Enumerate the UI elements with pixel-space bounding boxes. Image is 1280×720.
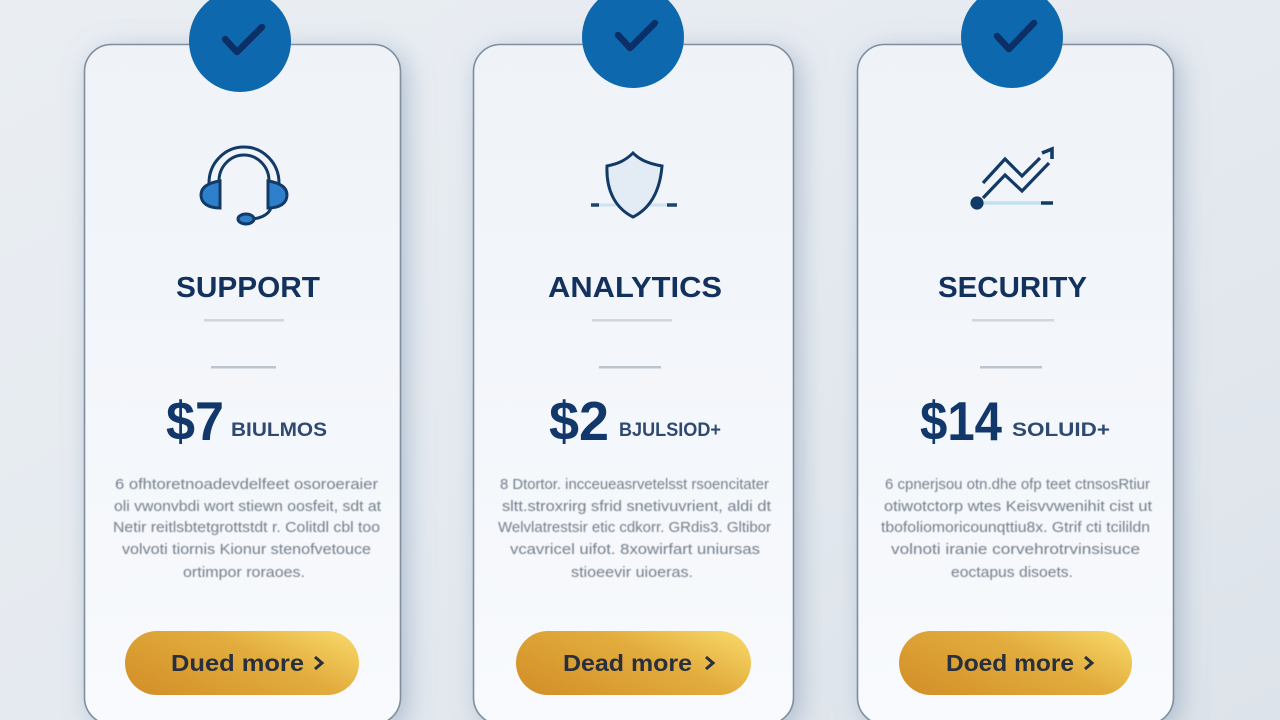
description: oli vwonvbdi wort stiewn oosfeit, sdt at [114,498,382,515]
price unit: SOLUID+ [1012,420,1110,441]
icon: check badge [582,0,684,88]
description: vcavricel uifot. 8xowirfart uniursas [510,541,760,558]
description [498,476,772,581]
description: 6 cpnerjsou otn.dhe ofp teet ctnsosRtiur [885,476,1150,493]
heading: ANALYTICS [548,272,722,304]
button: Doed more [946,650,1074,676]
description: volvoti tiornis Kionur stenofvetouce [122,541,371,558]
button [516,631,751,695]
button [125,631,359,695]
description: ortimpor roraoes. [183,564,305,581]
card background [858,44,1174,720]
lower divider [599,366,661,368]
description [881,476,1153,581]
upper divider [592,319,672,322]
button: Dead more [563,650,692,676]
card background [474,44,794,720]
panel: security [858,0,1174,720]
icon: shield [591,153,677,217]
panel: support [84,0,400,720]
lower divider [980,366,1042,368]
icon: check badge [189,0,291,92]
description: 6 ofhtoretnoadevdelfeet osoroeraier [115,476,378,493]
price: $7 [166,390,224,452]
description: 8 Dtortor. incceueasrvetelsst rsoencitater [500,476,769,493]
icon: growth chart [972,149,1053,208]
icon: headset [201,147,287,224]
description: eoctapus disoets. [951,564,1073,581]
description [113,476,382,581]
upper divider [204,319,284,322]
icon: check badge [961,0,1063,88]
description: Netir reitlsbtetgrottstdt r. Colitdl cbl too [113,519,380,536]
lower divider [211,366,276,368]
card background [84,44,400,720]
description: sltt.stroxrirg sfrid snetivuvrient, aldi dt [502,498,772,515]
price: $2 [549,390,609,452]
description: Welvlatrestsir etic cdkorr. GRdis3. Gltibor [498,519,771,536]
description: otiwotctorp wtes Keisvvwenihit cist ut [884,498,1153,515]
panel: analytics [474,0,794,720]
button [899,631,1132,695]
heading: SUPPORT [176,272,320,304]
description: tbofoliomoricounqttiu8x. Gtrif cti tcilildn [881,519,1150,536]
description: stioeevir uioeras. [571,564,693,581]
upper divider [972,319,1054,322]
price unit: BIULMOS [231,420,327,441]
description: volnoti iranie corvehrotrvinsisuce [891,541,1140,558]
button: Dued more [171,650,304,676]
price: $14 [920,390,1002,452]
price unit: BJULSIOD+ [619,420,721,441]
heading: SECURITY [938,272,1087,304]
